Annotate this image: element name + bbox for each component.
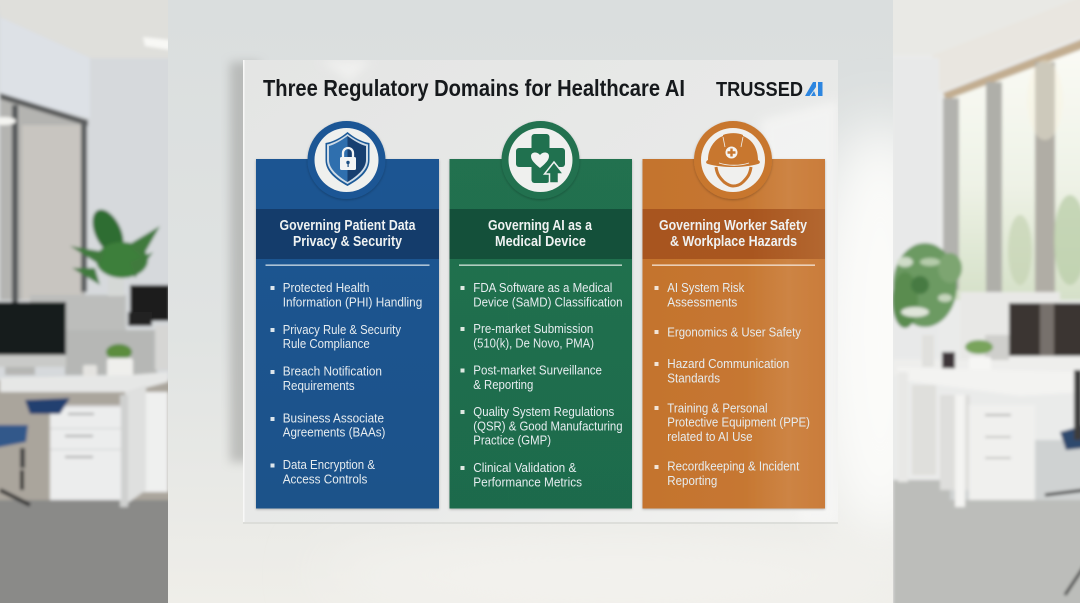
list: privacy items: Privacy Rule & Security xyxy=(283,322,402,337)
background: blurred office left xyxy=(0,0,175,603)
panel background xyxy=(256,159,439,508)
board shadow xyxy=(230,62,260,462)
panel background xyxy=(642,159,825,508)
column heading xyxy=(450,209,632,259)
panel background xyxy=(450,159,632,508)
list: device items: FDA Software as a Medical xyxy=(473,280,612,295)
list: safety items: Ergonomics & User Safety xyxy=(667,324,802,340)
panel: worker safety xyxy=(642,159,825,508)
list: safety items: Recordkeeping & Incident xyxy=(667,459,800,474)
list: privacy items: Access Controls xyxy=(283,472,367,486)
column heading xyxy=(256,209,439,259)
list: device items: Practice (GMP) xyxy=(473,433,551,448)
logo: TrussedAI: TRUSSED xyxy=(716,79,803,101)
list: privacy items: Data Encryption & xyxy=(283,457,375,472)
list: device items: Clinical Validation & xyxy=(473,460,577,475)
column heading xyxy=(642,209,825,259)
list: privacy items: Breach Notification xyxy=(283,364,382,379)
list: privacy items: Requirements xyxy=(283,378,355,393)
list: safety items: AI System Risk xyxy=(667,280,745,295)
list: device items: Device (SaMD) Classification xyxy=(473,294,623,310)
list: safety items: Training & Personal xyxy=(667,400,768,416)
column heading: Governing AI as a xyxy=(488,218,593,234)
list: device items: Quality System Regulations xyxy=(473,404,614,419)
panel: AI as a medical device xyxy=(450,159,632,508)
list: safety items: Hazard Communication xyxy=(667,356,789,371)
list: device items: Post-market Surveillance xyxy=(473,362,602,378)
panel: patient data privacy xyxy=(256,159,439,508)
background: blurred office right xyxy=(885,0,1080,603)
list: safety items: Standards xyxy=(667,370,720,386)
list: device items: & Reporting xyxy=(473,377,533,392)
column heading: Governing Patient Data xyxy=(280,218,416,234)
column heading: Privacy & Security xyxy=(293,234,402,250)
column heading: Governing Worker Safety xyxy=(659,218,807,234)
list: safety items: Reporting xyxy=(667,473,717,488)
list: safety items: Assessments xyxy=(667,294,737,310)
list: privacy items: Agreements (BAAs) xyxy=(283,425,385,440)
list: privacy items: Information (PHI) Handling xyxy=(283,294,422,310)
column heading: & Workplace Hazards xyxy=(670,234,797,250)
list: privacy items: Protected Health xyxy=(283,280,369,295)
column heading: Medical Device xyxy=(495,234,586,250)
icon: medical cross with heart and arrow xyxy=(502,121,580,199)
list: privacy items xyxy=(270,280,422,486)
list: device items: (510(k), De Novo, PMA) xyxy=(473,336,594,350)
icon: hard hat worker xyxy=(694,121,772,199)
list: safety items: related to AI Use xyxy=(667,429,753,444)
wall panel xyxy=(168,0,950,603)
list: device items: (QSR) & Good Manufacturing xyxy=(473,418,623,434)
board: signage panel xyxy=(243,60,838,524)
list: device items xyxy=(460,280,623,490)
list: safety items: Protective Equipment (PPE) xyxy=(667,415,810,430)
list: privacy items: Rule Compliance xyxy=(283,336,370,351)
list: privacy items: Business Associate xyxy=(283,410,384,426)
icon: shield with padlock xyxy=(308,121,386,199)
title: Three Regulatory Domains for Healthcare AI xyxy=(263,75,685,101)
list: device items: Pre-market Submission xyxy=(473,321,593,336)
list: safety items xyxy=(654,280,810,488)
list: device items: Performance Metrics xyxy=(473,474,582,490)
